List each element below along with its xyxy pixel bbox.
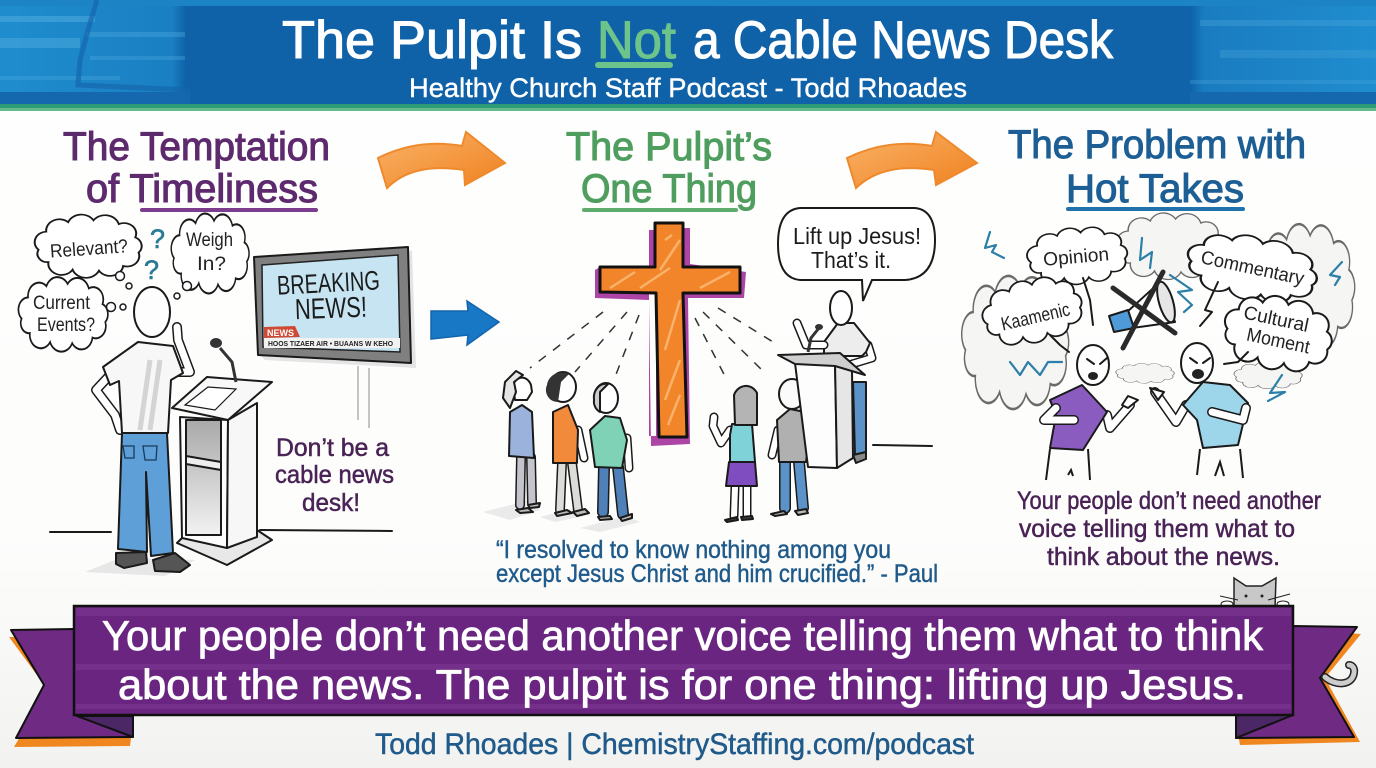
speech cloud: Cultural Moment: Cultural <box>1242 303 1311 337</box>
ribbon banner <box>9 606 1361 747</box>
left arguing figure <box>1044 345 1138 480</box>
speech cloud: Cultural Moment <box>1218 288 1338 379</box>
television: NEWS <box>267 328 294 338</box>
right arguing figure <box>1150 343 1248 478</box>
television: HOOS TIZAER AIR • BUAANS W KEHO <box>268 339 393 348</box>
caption: your people: think about the news. <box>1047 543 1280 571</box>
question marks: ? <box>150 224 165 254</box>
heading: The Temptation of Timeliness: The Temptation <box>63 125 330 169</box>
ribbon message <box>102 612 1264 708</box>
tv shadow lines <box>358 366 369 428</box>
ribbon message: Your people don’t need another voice telling them what to think <box>102 612 1264 659</box>
ribbon brush bands <box>76 608 1291 709</box>
person: woman in blue blouse <box>483 371 540 520</box>
speech cloud: Kaamenic <box>977 270 1088 352</box>
floor lines <box>50 530 392 532</box>
thought cloud: Current Events?: Events? <box>37 315 95 336</box>
television <box>254 247 416 368</box>
title: Not <box>597 11 676 70</box>
caption: Don't be a cable news desk: desk! <box>302 489 360 517</box>
cross <box>595 223 746 446</box>
person: boy in green <box>580 383 640 532</box>
heading: The Problem with Hot Takes: The Problem with <box>1008 123 1306 167</box>
television: NEWS! <box>294 292 368 326</box>
microphone <box>210 338 236 382</box>
grey storm clouds <box>962 213 1355 409</box>
person: girl in teal and purple skirt <box>713 386 757 522</box>
title <box>282 11 1113 70</box>
floor line <box>873 445 932 446</box>
thought cloud: Weigh In?: Weigh <box>186 230 233 251</box>
speech cloud: Kaamenic: Kaamenic <box>999 299 1072 336</box>
heading: The Problem with Hot Takes: Hot Takes <box>1066 167 1244 211</box>
caption: Don't be a cable news desk: cable news <box>275 461 394 489</box>
heading: The Temptation of Timeliness: of Timeliness <box>86 167 318 211</box>
arrow: orange to right panel <box>847 132 977 188</box>
cat tail <box>1325 665 1354 683</box>
lectern <box>172 377 272 565</box>
lightning bolts <box>985 232 1342 401</box>
title: The Pulpit Is <box>282 11 582 70</box>
speech bubble: Lift up Jesus <box>778 208 935 301</box>
right ribbon tail <box>1236 626 1357 738</box>
speech bubble: Lift up Jesus: That’s it. <box>811 247 891 273</box>
panel: temptation of timeliness <box>18 214 416 576</box>
thought cloud: Current Events?: Current <box>33 293 91 314</box>
speech cloud: Commentary <box>1182 226 1322 326</box>
caption: Don't be a cable news desk <box>275 434 394 517</box>
question marks: ? <box>144 255 159 285</box>
question marks <box>144 224 165 285</box>
thought cloud: Relevant?: Relevant? <box>49 236 129 263</box>
rays from cross <box>530 308 778 382</box>
caption: your people: voice telling them what to <box>1019 515 1295 543</box>
speech cloud: Opinion <box>1025 224 1129 325</box>
panel: the pulpit's one thing <box>483 208 938 588</box>
speech cloud: Opinion: Opinion <box>1042 244 1110 271</box>
thought cloud: Current Events? <box>18 277 108 352</box>
heading: The Pulpit's One Thing: One Thing <box>581 167 757 211</box>
title: a Cable News Desk <box>693 11 1113 70</box>
ribbon folds <box>77 715 1293 738</box>
panel: the problem with hot takes <box>962 213 1355 571</box>
thought cloud: Relevant? <box>35 215 142 278</box>
cat peeking over banner <box>1220 578 1290 608</box>
subtitle: Healthy Church Staff Podcast - Todd Rhoades <box>409 73 967 103</box>
thought cloud: Weigh In? <box>171 214 249 293</box>
heading: The Pulpit's One Thing: The Pulpit’s <box>566 125 772 169</box>
arrow: orange to middle panel <box>378 132 505 188</box>
pastor at pulpit <box>778 291 872 468</box>
thought cloud: Weigh In?: In? <box>197 254 226 275</box>
person: boy in grey <box>771 379 811 516</box>
heading: The Temptation of Timeliness <box>63 125 330 212</box>
speech cloud: Commentary: Commentary <box>1199 247 1306 290</box>
header band <box>0 0 1376 111</box>
caption: your people: Your people don’t need another <box>1017 487 1321 515</box>
speech bubble: Lift up Jesus: Lift up Jesus! <box>793 223 921 249</box>
speech cloud: Cultural Moment: Moment <box>1245 325 1312 359</box>
heading: The Problem with Hot Takes <box>1008 123 1306 211</box>
scripture quote <box>496 536 938 588</box>
thought bubbles <box>106 272 192 312</box>
scripture quote: “I resolved to know nothing among you <box>496 536 891 564</box>
crossed-out megaphone <box>1109 272 1179 348</box>
scripture quote: except Jesus Christ and him crucified.” - Paul <box>496 560 938 588</box>
main ribbon <box>74 606 1293 715</box>
figure: pastor from behind <box>85 287 195 576</box>
person: curly hair in orange <box>540 372 590 522</box>
television: BREAKING <box>276 265 381 301</box>
heading: The Pulpit's One Thing <box>566 125 772 212</box>
arrow: blue <box>431 301 499 345</box>
left ribbon tail <box>11 629 133 738</box>
ribbon message: about the news. The pulpit is for one thing: lifting up Jesus. <box>118 661 1246 708</box>
caption: your people <box>1017 487 1321 571</box>
ribbon orange shadow <box>9 630 1361 747</box>
caption: Don't be a cable news desk: Don’t be a <box>276 434 389 462</box>
footer credit: Todd Rhoades | ChemistryStaffing.com/podcast <box>375 728 975 761</box>
